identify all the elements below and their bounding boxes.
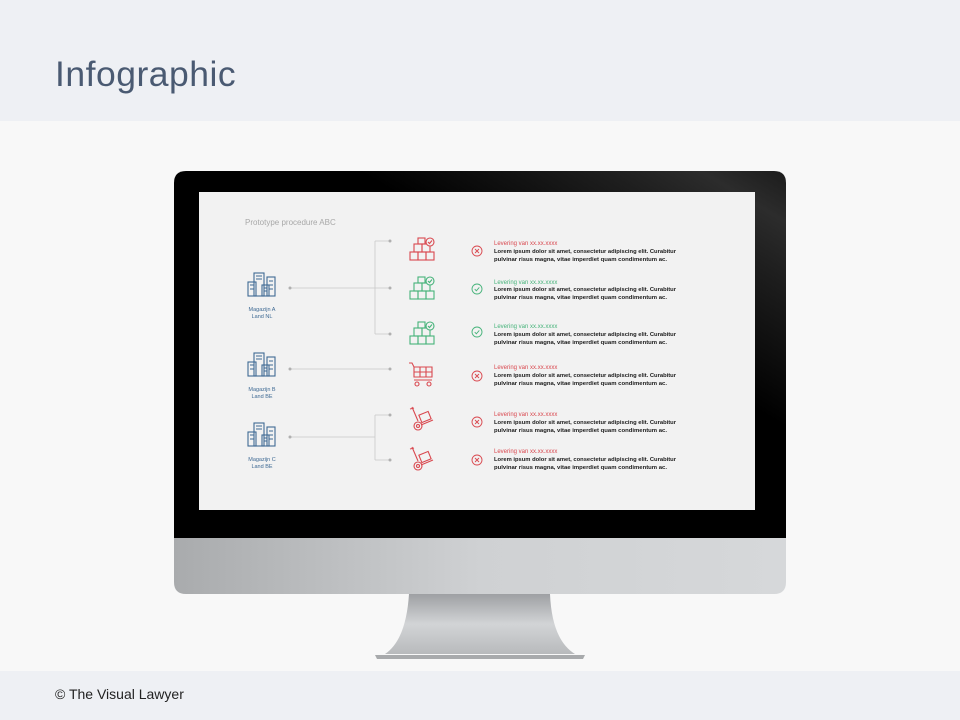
warehouse C — [248, 423, 276, 470]
footer credit: © The Visual Lawyer — [55, 686, 184, 702]
warehouse A — [248, 273, 276, 320]
delivery texts: Levering van xx.xx.xxxx — [494, 324, 557, 330]
chin — [174, 538, 786, 594]
delivery texts: Lorem ipsum dolor sit amet, consectetur adipiscing elit. Curabitur — [494, 457, 677, 463]
screen heading: Prototype procedure ABC — [245, 218, 336, 227]
title: Infographic — [55, 54, 236, 94]
status markers — [472, 246, 482, 465]
delivery texts — [494, 241, 677, 471]
screen content — [245, 218, 677, 471]
stand base — [375, 655, 585, 659]
delivery texts: Levering van xx.xx.xxxx — [494, 365, 557, 371]
icons — [409, 238, 434, 470]
warehouse A: Magazijn A — [249, 307, 276, 313]
delivery texts: pulvinar risus magna, vitae imperdiet quam condimentum ac. — [494, 381, 667, 387]
bezel — [174, 171, 786, 538]
delivery texts: Lorem ipsum dolor sit amet, consectetur adipiscing elit. Curabitur — [494, 373, 677, 379]
warehouse C: Magazijn C — [248, 457, 276, 463]
connector lines — [288, 240, 392, 462]
delivery texts: pulvinar risus magna, vitae imperdiet quam condimentum ac. — [494, 465, 667, 471]
warehouse B — [248, 353, 276, 400]
delivery texts: Levering van xx.xx.xxxx — [494, 280, 557, 286]
delivery texts: Lorem ipsum dolor sit amet, consectetur adipiscing elit. Curabitur — [494, 420, 677, 426]
delivery texts: pulvinar risus magna, vitae imperdiet quam condimentum ac. — [494, 295, 667, 301]
delivery texts: pulvinar risus magna, vitae imperdiet quam condimentum ac. — [494, 257, 667, 263]
stand — [385, 594, 575, 654]
warehouse A: Land NL — [252, 314, 272, 320]
delivery texts: Levering van xx.xx.xxxx — [494, 412, 557, 418]
monitor — [174, 171, 786, 659]
delivery texts: pulvinar risus magna, vitae imperdiet quam condimentum ac. — [494, 340, 667, 346]
header band — [0, 0, 960, 121]
warehouse B: Land BE — [251, 394, 273, 400]
delivery texts: Lorem ipsum dolor sit amet, consectetur adipiscing elit. Curabitur — [494, 332, 677, 338]
delivery texts: Levering van xx.xx.xxxx — [494, 241, 557, 247]
footer band — [0, 671, 960, 720]
warehouse C: Land BE — [251, 464, 273, 470]
delivery texts: Lorem ipsum dolor sit amet, consectetur adipiscing elit. Curabitur — [494, 287, 677, 293]
warehouse B: Magazijn B — [248, 387, 276, 393]
screen — [199, 192, 755, 510]
delivery texts: Lorem ipsum dolor sit amet, consectetur adipiscing elit. Curabitur — [494, 249, 677, 255]
delivery texts: pulvinar risus magna, vitae imperdiet quam condimentum ac. — [494, 428, 667, 434]
delivery texts: Levering van xx.xx.xxxx — [494, 449, 557, 455]
